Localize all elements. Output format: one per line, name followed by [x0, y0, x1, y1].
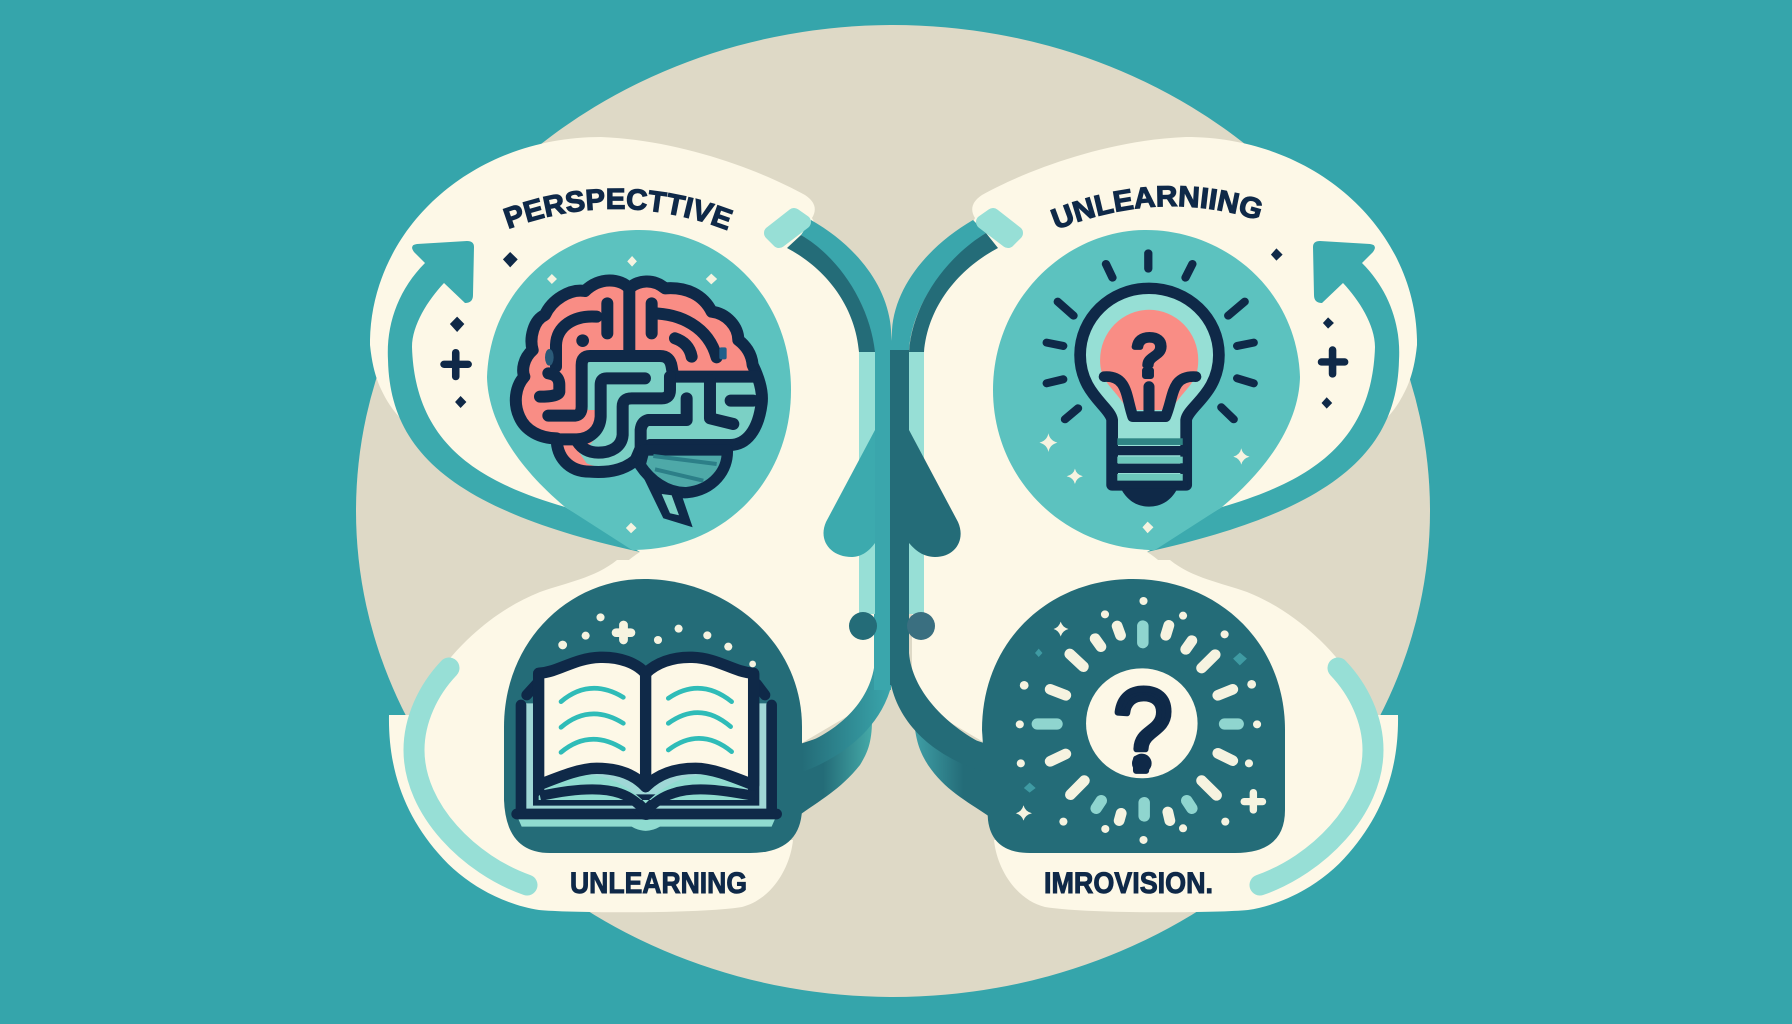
sparkles above book: [558, 613, 756, 667]
icon: light bulb with question mark: [1047, 253, 1254, 507]
icon: question mark burst: [1016, 597, 1262, 844]
sparkles and plus left: [444, 252, 717, 533]
panel: bottom right improvisation: [890, 560, 1398, 912]
panel: top right unlearning: [912, 137, 1417, 742]
cycle arrow left: [388, 241, 640, 552]
central connector left: [771, 215, 891, 690]
cycle arrow right: [1147, 241, 1399, 552]
panel: top left perspective: [370, 137, 874, 743]
connector arc right: [1260, 668, 1373, 885]
icon: open book: [517, 657, 777, 831]
circle behind bulb: [993, 230, 1300, 550]
heading: perspective: PERSPECTTIVE: [502, 188, 734, 231]
central connector right: [890, 215, 1016, 685]
beige backdrop ellipse: [356, 25, 1430, 997]
label: unlearning: UNLEARNING: [570, 867, 747, 900]
sparkles and plus right: [1039, 248, 1345, 533]
lower connector band right: [890, 640, 990, 817]
connector arc left: [414, 668, 527, 885]
circle behind brain: [487, 230, 791, 550]
panel: bottom left unlearning: [389, 560, 892, 912]
icon: light bulb with question mark: ?: [1132, 323, 1166, 389]
lower connector band left: [797, 640, 892, 817]
icon: question mark burst: ?: [1113, 665, 1172, 796]
dome bottom left: [504, 579, 802, 853]
label: improvisation: IMROVISION.: [1044, 867, 1213, 900]
icon: brain: [516, 281, 762, 527]
cream shape bottom right: [994, 560, 1398, 912]
cream shape top right: [912, 137, 1417, 750]
cream shape bottom left: [389, 560, 793, 912]
dome bottom right: [982, 579, 1285, 853]
cream shape top left: [370, 137, 875, 750]
heading: unlearning: UNLEARNIING: [1050, 186, 1262, 228]
